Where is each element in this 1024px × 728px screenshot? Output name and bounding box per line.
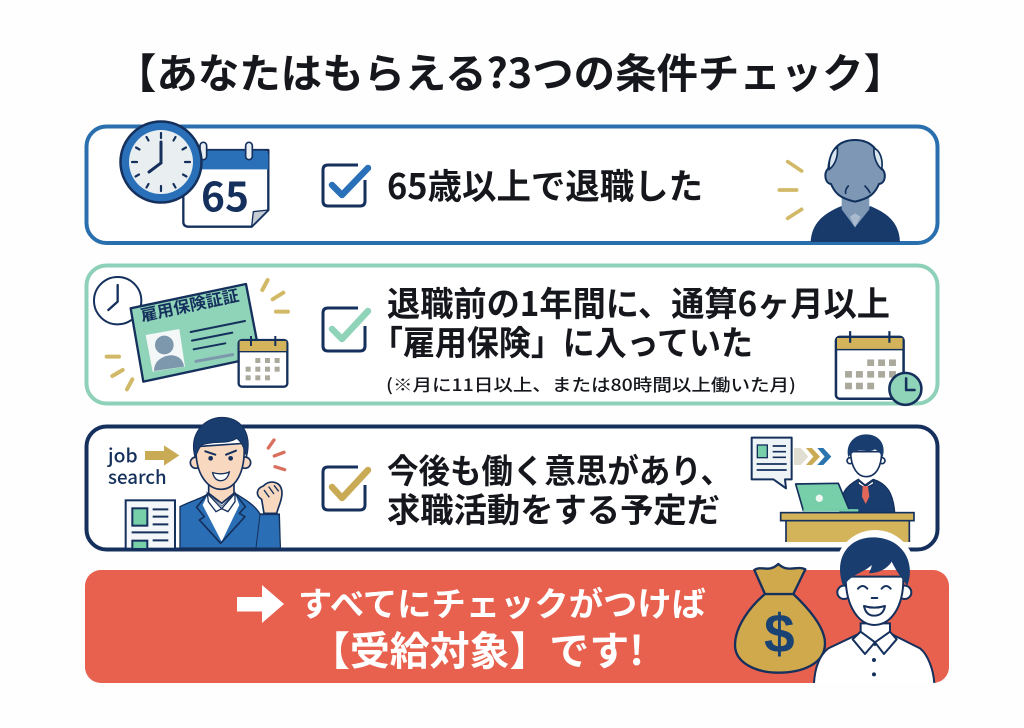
icon: money bag [735,564,825,673]
icon: online interview [752,434,914,542]
icon: checkbox 1 [323,165,368,206]
panel: result banner [85,537,949,683]
text: result [298,577,706,677]
icon: smiling person [814,537,934,683]
icon: money bag: $ [764,602,795,664]
icon: checkbox 2 [323,308,368,351]
panel: condition 2 [86,266,938,405]
text: condition 3: 今後も働く意思があり、 [387,444,732,493]
text: condition 3 [387,444,732,532]
text: condition 3: 求職活動をする予定だ [387,483,720,532]
text: condition 2 [371,277,890,396]
icon: calendar 65: 65 [201,165,249,224]
icon: calendar 65 [183,142,268,227]
panel: condition 3 [86,417,938,550]
icon: calendar and clock [836,331,921,405]
text: result: 【受給対象】です! [310,619,644,677]
text: condition 2: (※月に11日以上、または80時間以上働いた月) [386,371,796,396]
title: 【あなたはもらえる?3つの条件チェック】 [115,40,905,100]
icon: clock [120,122,202,202]
text: condition 2: 退職前の1年間に、通算6ヶ月以上 [387,277,890,326]
icon: insurance card [94,277,288,389]
panel: condition 1 [86,122,938,243]
icon: checkbox 3 [323,467,368,510]
icon: insurance card: 雇用保険証証 [138,282,241,326]
icon: job search man: job [107,441,138,469]
icon: white arrow [237,585,284,623]
icon: senior man [779,140,900,242]
text: condition 2: 「雇用保険」に入っていた [371,316,753,365]
white halo behind the person [835,530,915,610]
text: result: すべてにチェックがつけば [298,577,706,626]
icon: job search man [107,417,285,549]
text: condition 1: 65歳以上で退職した [387,159,703,210]
icon: job search man: search [108,463,167,490]
